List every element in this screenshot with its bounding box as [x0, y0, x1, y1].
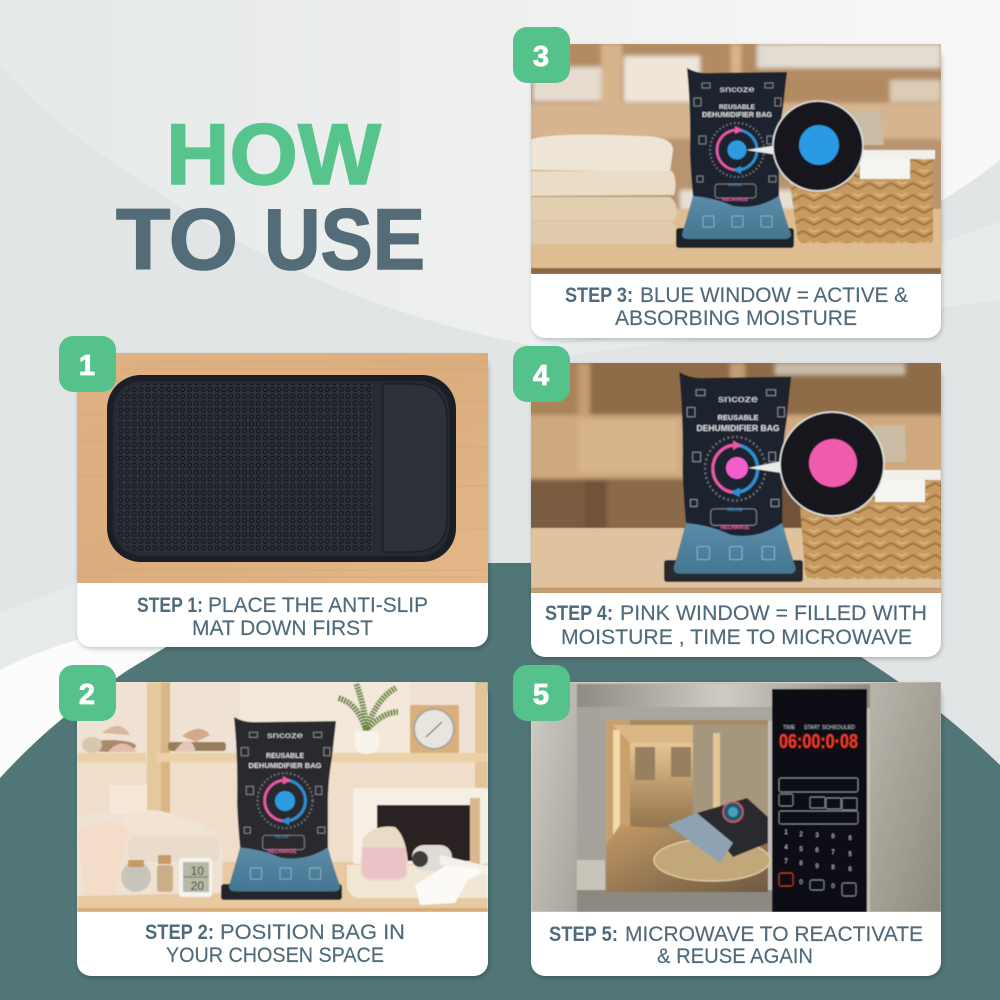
- mat: [107, 375, 456, 562]
- mat under bag: [221, 884, 342, 900]
- cavity: [606, 720, 770, 892]
- caption: step 2: [145, 921, 405, 967]
- basket: [790, 112, 935, 243]
- caption: step 1: STEP 1:: [137, 594, 203, 617]
- control panel: 5: [799, 847, 803, 853]
- badge: step 5: 5: [533, 679, 549, 711]
- caption card: step 2: [77, 682, 488, 976]
- caption: step 4: [545, 602, 927, 649]
- panel: step 3: [525, 40, 945, 338]
- control panel: 4: [784, 845, 788, 851]
- control panel: 8: [831, 865, 835, 871]
- control panel: START: [804, 725, 820, 731]
- bag: sncoze: [718, 394, 758, 404]
- caption: step 3: [565, 284, 908, 330]
- caption: step 4: STEP 4:: [545, 602, 613, 625]
- photo: anti-slip mat on wood: [77, 353, 488, 583]
- control panel: 6: [815, 848, 819, 854]
- control panel: 0: [831, 884, 835, 890]
- control panel: 7: [831, 850, 835, 856]
- control panel: 9: [815, 864, 819, 870]
- bag: REUSABLE: [719, 104, 756, 111]
- badge: step 2: [59, 665, 116, 721]
- badge: step 3: 3: [533, 41, 549, 73]
- bag: RECHARGE: [721, 525, 750, 531]
- control panel: 5: [848, 852, 852, 858]
- panel: step 1: [77, 353, 488, 647]
- heading line: TO USE: TO: [116, 192, 238, 288]
- caption: step 3: STEP 3:: [565, 284, 633, 307]
- bag: sncoze: [720, 85, 755, 94]
- caption card: step 3: [531, 44, 941, 338]
- control panel: 6: [848, 867, 852, 873]
- door frame: [577, 684, 870, 708]
- bag: REUSE: [727, 507, 743, 512]
- bag: [674, 372, 796, 574]
- caption: step 2: STEP 2:: [145, 921, 214, 944]
- badge: step 1: [59, 336, 116, 392]
- badge: step 4: 4: [533, 360, 549, 392]
- jars: [121, 855, 173, 892]
- table: [77, 862, 488, 912]
- caption card: step 5: [531, 682, 941, 976]
- photo: pink window: [525, 358, 945, 598]
- shells: [82, 726, 226, 753]
- panel: step 4: [525, 358, 945, 657]
- caption: step 3: ABSORBING MOISTURE: [615, 307, 857, 330]
- bag: DEHUMIDIFIER BAG: [696, 424, 780, 433]
- badge: step 3: [513, 27, 570, 83]
- bag inside microwave: [668, 798, 768, 863]
- bag: REUSABLE: [266, 753, 304, 760]
- control panel: 7: [784, 859, 788, 865]
- bag: REUSE: [728, 182, 742, 187]
- caption: step 2: YOUR CHOSEN SPACE: [166, 944, 384, 967]
- badge: step 2: 2: [79, 679, 95, 711]
- caption: step 1: PLACE THE ANTI-SLIP: [208, 594, 428, 617]
- control panel: 8: [831, 834, 835, 840]
- heading line: TO USE: [116, 192, 425, 288]
- control panel: 6: [848, 836, 852, 842]
- control panel: 0: [799, 880, 803, 886]
- control panel: 8: [799, 861, 803, 867]
- photo: bag on shelf: [77, 682, 488, 912]
- caption: step 5: & REUSE AGAIN: [657, 945, 813, 968]
- panel: step 5: [531, 682, 941, 976]
- control panel: 1: [784, 830, 788, 836]
- caption: step 3: BLUE WINDOW = ACTIVE &: [640, 284, 908, 307]
- bag: RECHARGE: [722, 197, 748, 202]
- bag: REUSE: [275, 834, 289, 839]
- bag: [682, 68, 791, 239]
- mat under bag: [664, 560, 803, 582]
- caption card: step 4: [531, 363, 941, 657]
- heading line: TO USE: USE: [264, 192, 425, 288]
- microwave: [353, 788, 488, 864]
- caption: step 1: [137, 594, 428, 640]
- photo: microwave: [531, 682, 941, 912]
- control panel: TIME: [783, 725, 796, 731]
- caption: step 1: MAT DOWN FIRST: [192, 617, 373, 640]
- thermometer: [179, 858, 212, 897]
- thermometer: 20: [191, 879, 204, 893]
- magnifier: pink window: [780, 412, 884, 516]
- badge: step 4: [513, 346, 570, 402]
- magnifier: blue window: [773, 101, 863, 191]
- clock: [410, 705, 459, 753]
- callout pointer: [746, 145, 774, 155]
- control panel: SCHEDULED: [822, 725, 855, 731]
- title: [116, 107, 425, 288]
- mat under bag: [676, 228, 794, 248]
- caption: step 5: STEP 5:: [549, 923, 618, 946]
- control panel: 3: [815, 833, 819, 839]
- photo: blue window: [525, 40, 945, 280]
- plant: [338, 683, 398, 754]
- badge: step 1: 1: [79, 350, 95, 382]
- control panel: [772, 689, 867, 912]
- bag: REUSABLE: [718, 415, 759, 422]
- basket: [800, 425, 941, 579]
- bag: [229, 717, 340, 891]
- bag: DEHUMIDIFIER BAG: [702, 112, 773, 119]
- caption card: step 1: [77, 353, 488, 647]
- towels: [531, 135, 677, 244]
- caption: step 5: MICROWAVE TO REACTIVATE: [625, 923, 923, 946]
- pouch, dryer, gloves: [347, 826, 488, 905]
- callout pointer: [748, 461, 782, 473]
- bag: RECHARGE: [268, 849, 297, 855]
- control panel: 2: [799, 832, 803, 838]
- bag: sncoze: [267, 731, 304, 740]
- thermometer: 10: [191, 864, 204, 878]
- caption: step 5: [549, 923, 923, 968]
- badge: step 5: [513, 665, 570, 721]
- caption: step 4: PINK WINDOW = FILLED WITH: [620, 602, 927, 625]
- caption: step 4: MOISTURE , TIME TO MICROWAVE: [561, 626, 912, 649]
- digital display: 06:00:0·08: [779, 731, 858, 753]
- folded towels: [77, 810, 223, 896]
- bag: DEHUMIDIFIER BAG: [248, 761, 322, 770]
- caption: step 2: POSITION BAG IN: [220, 921, 405, 944]
- panel: step 2: [77, 682, 488, 976]
- heading line: HOW: HOW: [166, 107, 382, 203]
